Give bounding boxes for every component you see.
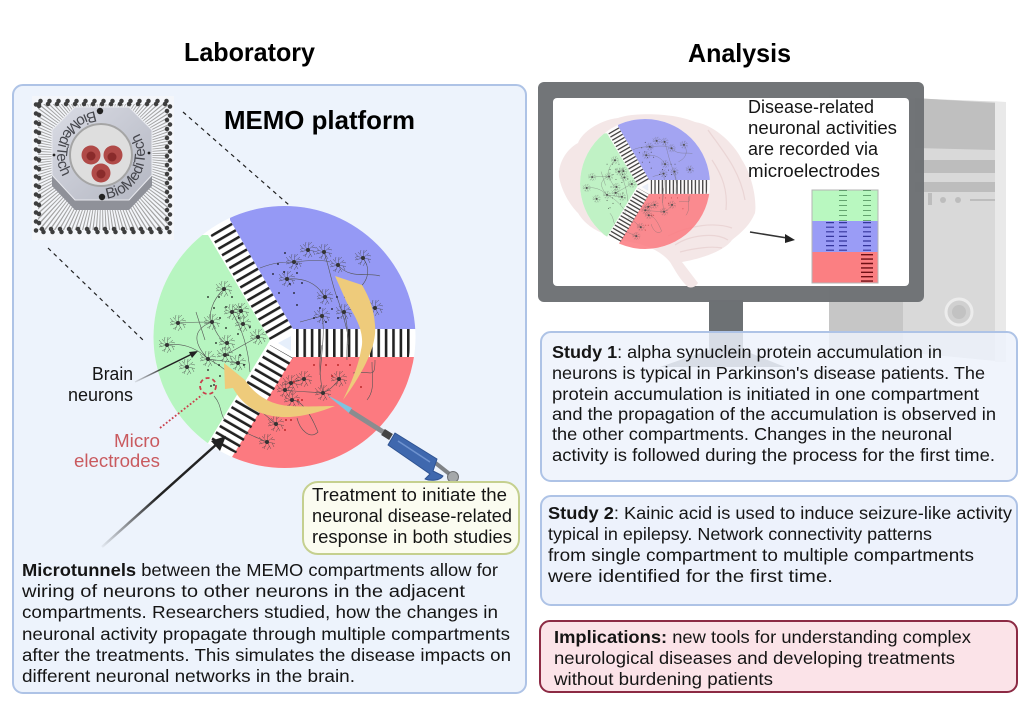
label: Brain neurons: Brain (92, 364, 133, 384)
callout: treatment (303, 482, 519, 554)
heading: MEMO platform: MEMO platform (224, 105, 415, 135)
callout: treatment: neuronal disease-related (312, 506, 512, 526)
icon: MEMO chip: BioMediTech (106, 134, 145, 199)
panel: study 1 (541, 332, 1017, 481)
text: recording caption (748, 96, 897, 181)
text block: microtunnels: compartments. Researchers studied, how the changes in (22, 602, 498, 622)
chart: small MEMO disc over brain (573, 111, 717, 255)
arrow: to recordings (750, 232, 795, 243)
icon: pipette (327, 395, 458, 482)
callout: treatment: Treatment to initiate the (312, 485, 507, 505)
label: Micro electrodes: Micro (114, 431, 160, 451)
text: recording caption: Disease-related (748, 96, 874, 117)
panel: study 1: and the propagation of the accumulation is observed in (552, 404, 996, 424)
icon: MEMO chip: BioMediTech (57, 111, 96, 176)
icon: monitor (538, 82, 924, 367)
callout ring: microelectrodes (160, 378, 216, 428)
panel: study 1: activity is followed during the process for the first time. (552, 445, 995, 465)
text block: microtunnels: different neuronal networks in the brain. (22, 666, 355, 686)
arrow: treatment propagation to purple (335, 276, 375, 400)
icon: computer tower (829, 95, 1006, 362)
panel: study 2 (541, 496, 1017, 605)
panel: implications: Implications: new tools for understanding complex (554, 627, 971, 647)
panel: study 2: were identified for the first time. (547, 566, 833, 586)
panel: implications: neurological diseases and developing treatments (554, 648, 955, 668)
panel: laboratory (12, 84, 527, 694)
dashed zoom line: upper (183, 112, 297, 212)
label: Micro electrodes (74, 431, 160, 471)
icon: brain (559, 114, 755, 288)
panel: study 1: neurons is typical in Parkinson's disease patients. The (552, 363, 985, 383)
text block: microtunnels: wiring of neurons to other neurons in the adjacent (21, 581, 465, 601)
panel: implications: without burdening patients (553, 669, 773, 689)
panel: study 2: from single compartment to multiple compartments (548, 545, 974, 565)
dashed zoom line: lower (48, 248, 143, 340)
panel: study 1: protein accumulation is initiated in one compartment (552, 384, 979, 404)
panel: study 1: the other compartments. Changes in the neuronal (552, 424, 952, 444)
panel: study 2: typical in epilepsy. Network connectivity patterns (548, 524, 932, 544)
label: Brain neurons (68, 364, 133, 405)
text: recording caption: are recorded via (748, 138, 879, 159)
icon: MEMO chip (34, 98, 172, 234)
label: Brain neurons: neurons (68, 385, 133, 405)
chart: spike raster (812, 190, 878, 283)
text block: microtunnels (21, 560, 511, 686)
arrow: treatment propagation to green (224, 363, 335, 417)
title: Analysis: Analysis (688, 38, 791, 68)
text: recording caption: microelectrodes (748, 160, 880, 181)
text: recording caption: neuronal activities (748, 117, 897, 138)
arrow: to microtunnels (102, 436, 226, 547)
panel: study 2: Study 2: Kainic acid is used to induce seizure-like activity (548, 503, 1012, 523)
text block: microtunnels: after the treatments. This simulates the disease impacts on (22, 645, 511, 665)
text block: microtunnels: Microtunnels between the MEMO compartments allow for (22, 560, 498, 580)
label: Micro electrodes: electrodes (74, 451, 160, 471)
panel: implications (540, 621, 1017, 692)
panel: study 1: Study 1: alpha synuclein protein accumulation in (552, 342, 942, 362)
callout: treatment: response in both studies (312, 527, 512, 547)
chart: MEMO compartments disc (140, 190, 430, 480)
arrow: to brain neurons (135, 351, 198, 382)
text block: microtunnels: neuronal activity propagate through multiple compartments (22, 624, 510, 644)
title: Laboratory: Laboratory (184, 37, 316, 67)
